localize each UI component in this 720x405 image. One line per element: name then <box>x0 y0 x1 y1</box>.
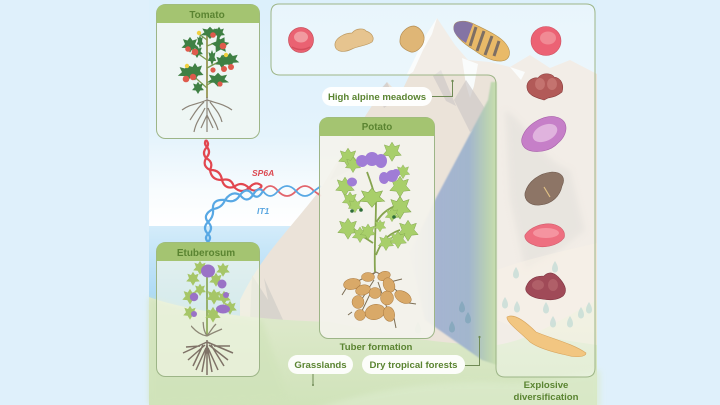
heading: Tuber formation: Tuber formation <box>340 342 413 353</box>
tuber: brown <box>525 172 564 205</box>
label: SP6A: SP6A <box>252 168 274 178</box>
tuber: red round <box>288 28 314 52</box>
heading: Potato: Potato <box>362 122 392 133</box>
heading: Tomato: Tomato <box>189 10 225 21</box>
label: IT1: IT1 <box>257 206 270 216</box>
illustration: etuberosum plant <box>182 261 237 375</box>
label: Grasslands: Grasslands <box>294 360 347 371</box>
panel: diversified potato tubers outline <box>271 4 595 377</box>
tuber: dark red lumpy <box>526 273 565 300</box>
illustration: tomato plant <box>178 27 239 132</box>
heading: Explosive diversification: Explosive <box>524 380 568 391</box>
tuber: dark red knobbly <box>527 74 563 100</box>
tuber: purple <box>522 116 566 152</box>
panel: Etuberosum <box>156 242 260 376</box>
DNA strand: merged red and blue <box>263 186 321 196</box>
tuber: tan long <box>335 29 373 51</box>
DNA strand: SP6A red <box>204 140 262 191</box>
tuber: long yellow <box>507 316 586 357</box>
illustration: potato plant <box>336 142 418 328</box>
heading: Etuberosum: Etuberosum <box>177 248 235 259</box>
label: Dry tropical forests <box>362 336 481 374</box>
DNA strand: IT1 blue <box>205 189 263 242</box>
tuber: tan round <box>400 26 424 52</box>
tuber: pink round <box>531 26 561 56</box>
label: High alpine meadows: High alpine meadows <box>328 92 426 103</box>
panel: Potato <box>320 118 434 338</box>
tuber: purple and yellow striped <box>454 21 509 61</box>
label: High alpine meadows <box>322 80 454 106</box>
label: Grasslands <box>288 355 353 386</box>
heading: Explosive diversification: diversification <box>513 392 579 403</box>
panel: tomato <box>156 4 260 138</box>
tuber: pink flat <box>525 224 564 247</box>
label: Dry tropical forests: Dry tropical forests <box>370 360 457 371</box>
background scene <box>149 0 600 405</box>
